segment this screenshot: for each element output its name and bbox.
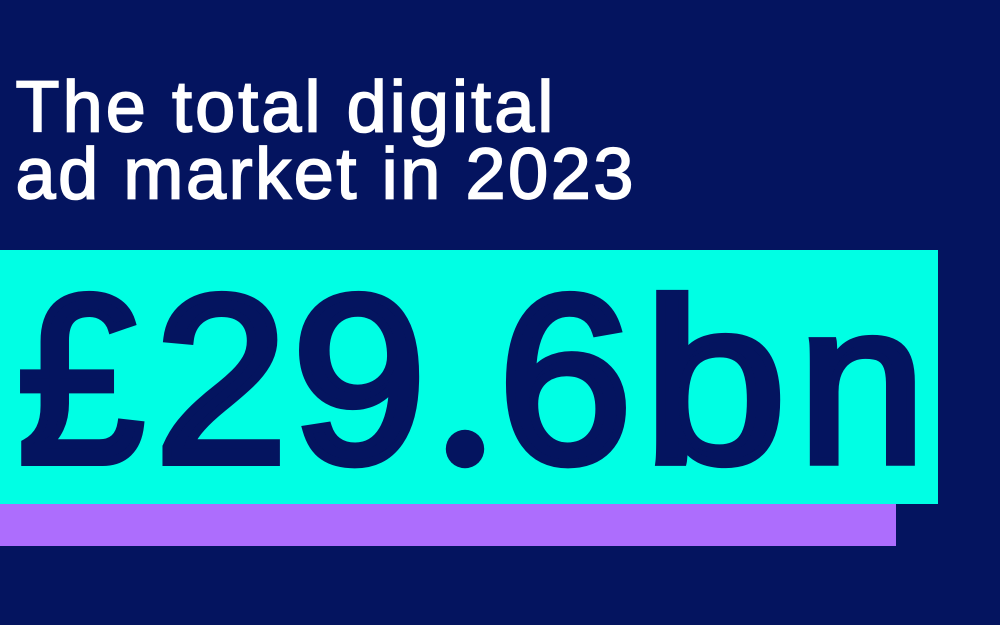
turquoise highlight panel [0,250,938,504]
big value: £ [18,247,144,513]
purple shadow bar [0,504,896,546]
heading: The total digital [16,68,556,148]
heading [16,68,636,214]
big value: 6 [498,246,632,512]
big value: 2 [155,248,287,512]
heading: ad market in 2023 [16,134,636,214]
decimal point: . [438,290,491,502]
big value: b [644,252,786,511]
big value [18,246,925,513]
big value: n [798,257,925,510]
big value: 9 [292,246,426,512]
